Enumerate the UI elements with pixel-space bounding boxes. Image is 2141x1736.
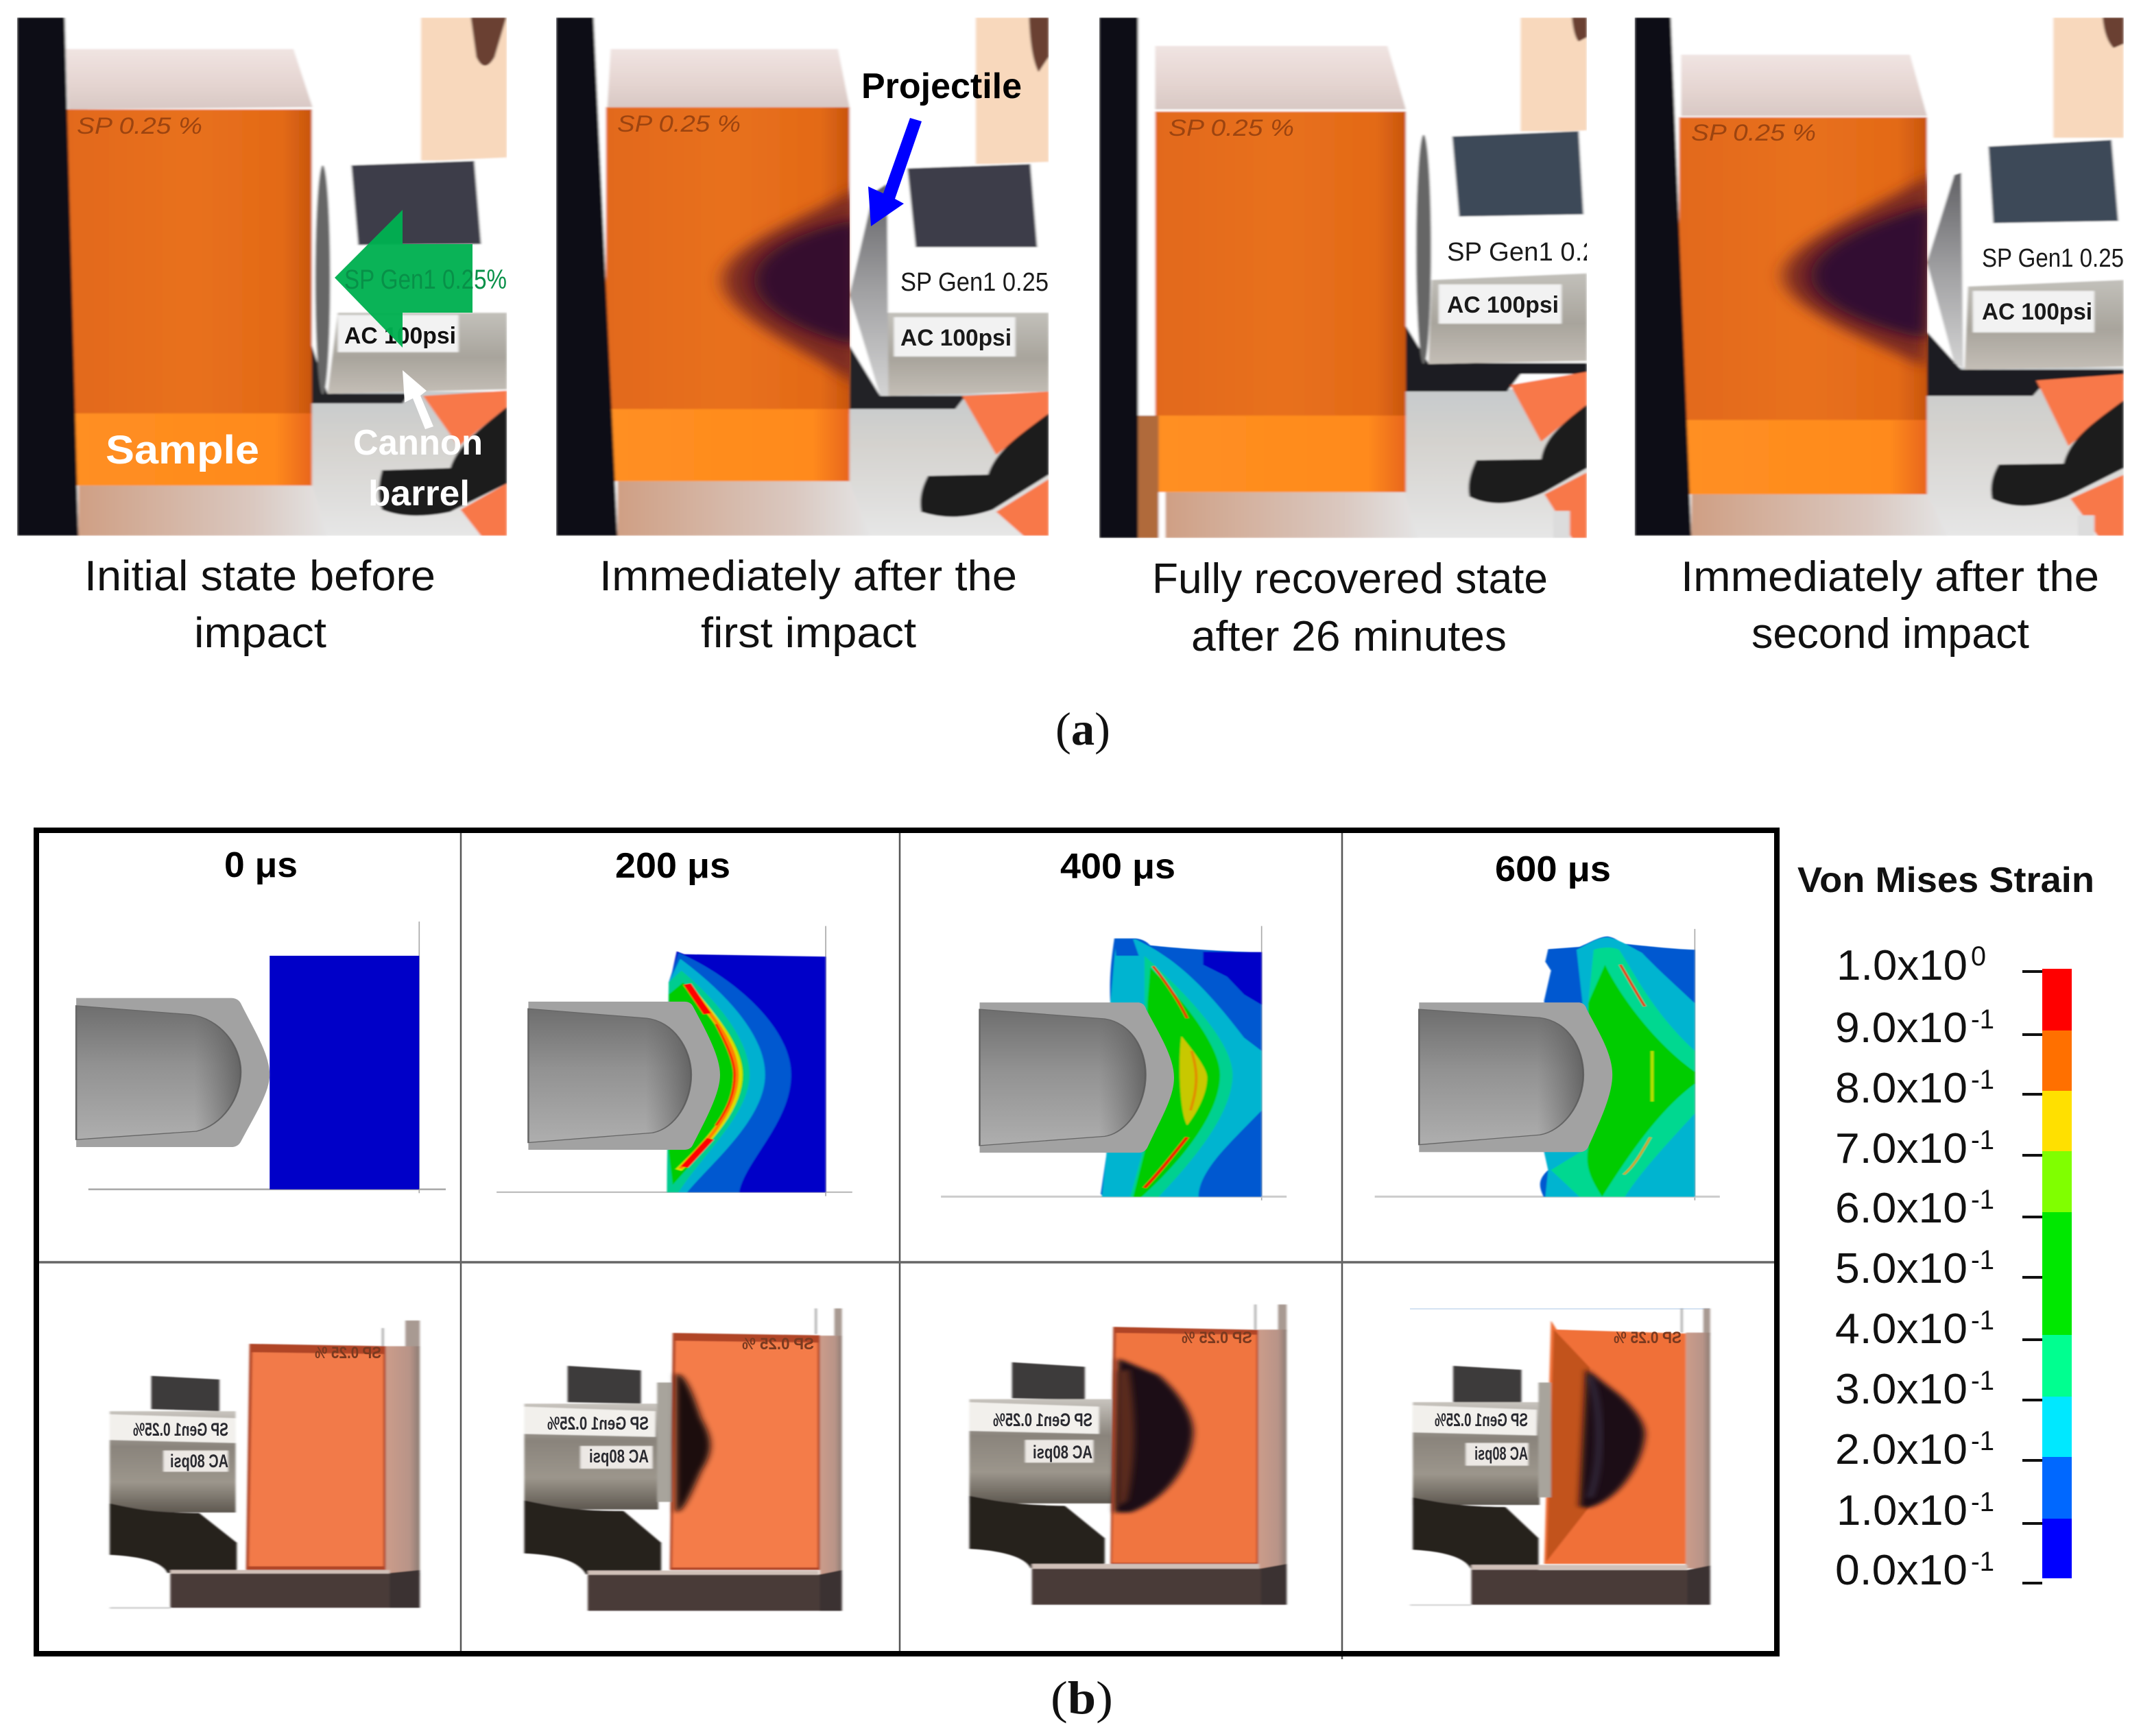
icon: green direction arrow (335, 210, 473, 348)
photo: 400 microseconds (970, 1305, 1287, 1605)
colour bar labels: 1.0x10 (1837, 1487, 1967, 1534)
panel: fully recovered photo (1099, 18, 1612, 538)
colour bar labels: 1.0x10 (1837, 942, 1967, 989)
photo text: mirrored labels (1435, 1329, 1682, 1464)
dark impact zone (1114, 1358, 1193, 1512)
handwritten sample mark: SP 0.25 % (1169, 115, 1294, 141)
dark impact zone (675, 1373, 710, 1512)
colour bar labels: -1 (1971, 1245, 1994, 1275)
figure label (b): (b) (1051, 1672, 1113, 1724)
photo text: mirrored labels: SP Gen1 0.25% (547, 1413, 649, 1434)
label: projectile: Projectile (861, 67, 1022, 106)
colour bar labels: -1 (1971, 1547, 1994, 1577)
colour bar ticks (2022, 972, 2042, 1583)
colour bar labels: 0 (1971, 941, 1986, 972)
figure label (a): (a) (1055, 703, 1110, 755)
column headers: 200 μs (615, 846, 730, 886)
photo: 200 microseconds (525, 1308, 842, 1611)
photo: 0 microseconds (110, 1321, 420, 1608)
photo text: mirrored labels: SP Gen1 0.25% (1435, 1410, 1528, 1430)
colour bar labels: 2.0x10 (1835, 1426, 1967, 1473)
simulation: 600 microseconds (1375, 929, 1720, 1201)
colour bar labels: 0.0x10 (1835, 1547, 1967, 1594)
colour bar labels: -1 (1971, 1004, 1994, 1035)
legend: Von Mises strain (1797, 860, 2094, 1594)
label: sample: Sample (106, 428, 259, 472)
label: cannon barrel: barrel (368, 474, 470, 514)
photo text: mirrored labels: SP 0.25 % (1182, 1329, 1252, 1347)
photo: 600 microseconds (1410, 1308, 1710, 1606)
colour bar labels: -1 (1971, 1366, 1994, 1396)
panel: after first impact photo (556, 18, 1049, 536)
column headers: 0 μs (224, 845, 298, 885)
caption: recovered state: after 26 minutes (1191, 613, 1507, 660)
colour bar labels: 7.0x10 (1835, 1125, 1967, 1172)
barrel labels: AC 100psi (900, 325, 1012, 351)
colour bar labels: -1 (1971, 1487, 1994, 1517)
colour bar labels: 9.0x10 (1835, 1004, 1967, 1052)
grid lines (36, 830, 1777, 1659)
photo text: mirrored labels (993, 1329, 1252, 1462)
legend title: Von Mises Strain (1797, 860, 2094, 900)
dark impact blob (1784, 173, 1934, 367)
photo text: mirrored labels: AC 80psi (1033, 1442, 1092, 1462)
colour bar labels: -1 (1971, 1065, 1994, 1095)
colour bar labels: 4.0x10 (1835, 1305, 1967, 1353)
column headers: 400 μs (1060, 847, 1175, 887)
photo text: mirrored labels: SP Gen1 0.25% (993, 1410, 1092, 1430)
colour bar labels: -1 (1971, 1426, 1994, 1456)
handwritten sample mark: SP 0.25 % (617, 111, 741, 137)
icon: blue arrow to projectile (868, 118, 922, 226)
colour bar labels: 6.0x10 (1835, 1185, 1967, 1232)
colour bar labels: -1 (1971, 1185, 1994, 1215)
frame (36, 830, 1777, 1654)
barrel labels: SP Gen1 0.25 (900, 268, 1049, 297)
caption: second impact: second impact (1751, 610, 2029, 658)
simulation: 0 microseconds (76, 921, 446, 1193)
photo text: mirrored labels: SP Gen1 0.25% (133, 1419, 228, 1440)
icon: white arrow to barrel (403, 370, 433, 429)
colour bar labels: 5.0x10 (1835, 1245, 1967, 1292)
barrel labels: SP Gen1 0.25 (1982, 244, 2124, 273)
dark impact zone (1579, 1369, 1645, 1508)
barrel labels: AC 100psi (1982, 299, 2092, 325)
dark impact blob (723, 186, 860, 387)
colour bar labels: 8.0x10 (1835, 1065, 1967, 1112)
caption: initial state: impact (194, 610, 326, 657)
caption: first impact: first impact (701, 610, 916, 657)
colour bar labels (1835, 941, 1994, 1594)
photo text: mirrored labels: AC 80psi (589, 1446, 649, 1467)
label: cannon barrel: Cannon (353, 423, 483, 463)
panel: after second impact photo (1635, 18, 2124, 536)
handwritten sample mark: SP 0.25 % (1691, 120, 1816, 146)
column headers (224, 845, 1611, 889)
photo text: mirrored labels: SP 0.25 % (742, 1335, 814, 1353)
photo text: mirrored labels: SP 0.25 % (1614, 1329, 1682, 1347)
handwritten sample mark: SP 0.25 % (77, 113, 202, 139)
barrel labels (1447, 243, 1587, 317)
colour bar labels: -1 (1971, 1305, 1994, 1336)
barrel text under arrow: SP Gen1 0.25% (344, 265, 507, 295)
panel: simulation vs high-speed image grid (36, 830, 1777, 1659)
photo text: mirrored labels: AC 80psi (170, 1451, 228, 1471)
photo text: mirrored labels (547, 1335, 814, 1467)
colour bar labels: -1 (1971, 1125, 1994, 1155)
barrel labels: AC 100psi (1447, 292, 1559, 318)
column headers: 600 μs (1495, 849, 1611, 889)
barrel label: AC 100psi (344, 323, 456, 349)
caption: recovered state: Fully recovered state (1152, 555, 1548, 603)
caption: second impact: Immediately after the (1681, 553, 2099, 601)
caption: first impact: Immediately after the (599, 553, 1017, 600)
caption: initial state: Initial state before (84, 553, 435, 600)
photo text: mirrored labels: AC 80psi (1474, 1443, 1528, 1464)
colour bar (2042, 969, 2072, 1578)
simulation: 200 microseconds (497, 926, 852, 1196)
barrel labels: SP Gen1 0.25 (1447, 238, 1612, 267)
panel: initial state photo (17, 18, 507, 536)
photo text: mirrored labels: SP 0.25 % (315, 1344, 381, 1362)
simulation: 400 microseconds (941, 926, 1287, 1201)
colour bar labels: 3.0x10 (1835, 1366, 1967, 1413)
photo text: mirrored labels (133, 1344, 381, 1471)
